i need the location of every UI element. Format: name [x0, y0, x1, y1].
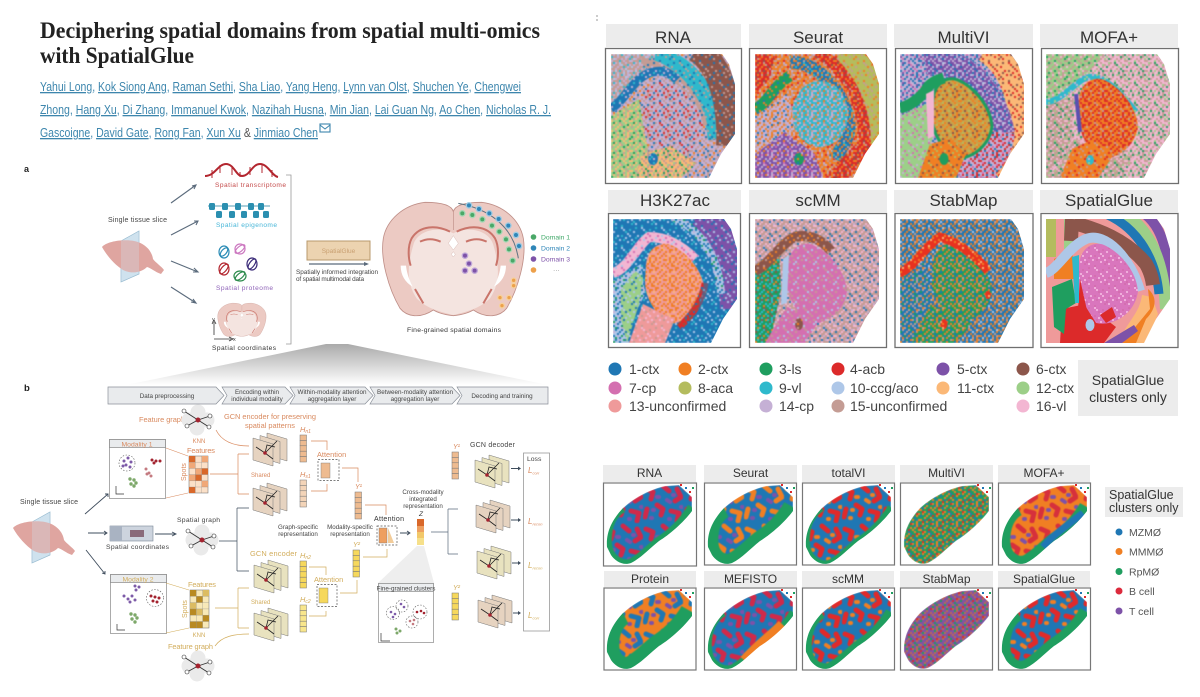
modality-specific attention: Attention [374, 516, 404, 523]
yellow embeddings and attention: Attention [314, 575, 343, 584]
yellow embeddings and attention: H [300, 595, 305, 604]
brain map: Seurat: Seurat [793, 28, 843, 47]
feature matrix 2: Spots [182, 600, 189, 618]
spleen map: scMM [802, 571, 894, 670]
cluster legend: spleen: clusters only [1109, 501, 1179, 515]
loss box [524, 453, 550, 631]
cross-modality Z [402, 489, 458, 554]
title: Deciphering spatial domains from spatial multi-omics [40, 18, 540, 43]
feature matrix 2: KNN [193, 633, 205, 639]
brain map: scMM: scMM [795, 191, 841, 210]
pipeline chevrons: Data preprocessing [140, 393, 195, 400]
cluster legend: brain: 2-ctx [698, 361, 728, 377]
encoders yellow [251, 560, 288, 641]
brain map: Seurat [749, 24, 887, 184]
orange routing [210, 454, 249, 494]
cluster legend: brain: 12-ctx [1036, 380, 1074, 396]
graph-specific caption: Graph-specific [278, 524, 318, 531]
spatial graph: Spatial graph [177, 517, 220, 524]
yellow embeddings and attention: c2 [305, 599, 311, 605]
orange embeddings and attention: s1 [305, 474, 311, 480]
fine-grained clusters inset [377, 546, 435, 642]
cross-modality Z: representation [403, 503, 443, 510]
cluster legend: spleen: MZMØ [1129, 527, 1161, 539]
spleen map: totalVI [802, 465, 895, 565]
modality: spatial transcriptome: Spatial transcriptome [215, 182, 286, 189]
pipeline chevrons [108, 387, 548, 404]
spleen map: MultiVI: MultiVI [928, 466, 965, 480]
yellow embeddings and attention: n2 [305, 555, 311, 561]
spleen map: Protein: Protein [631, 572, 669, 586]
spleen map: MOFA+: MOFA+ [1023, 466, 1065, 480]
pipeline chevrons: Decoding and training [471, 393, 533, 400]
cluster legend: brain: 3-ls [779, 361, 802, 377]
brain map: SpatialGlue: SpatialGlue [1065, 191, 1153, 210]
GCN encoder yellow title: GCN encoder [250, 549, 298, 558]
brain caption: Fine-grained spatial domains [407, 327, 502, 334]
author list: Zhong, Hang Xu, Di Zhang, Immanuel Kwok, Nazihah Husna, Min Jian, Lai Guan Ng, Ao Chen, Nicholas R. J. [40, 102, 551, 117]
brain map: MultiVI [894, 24, 1033, 184]
cluster legend: brain: SpatialGlue [1092, 372, 1164, 388]
feature matrix 2 [182, 580, 216, 639]
feature matrix 2: Features [188, 580, 216, 589]
orange embeddings and attention: n1 [305, 429, 311, 435]
author list: Gascoigne, David Gate, Rong Fan, Xun Xu & Jinmiao Chen [40, 125, 318, 140]
brain map: StabMap [894, 190, 1033, 348]
SpatialGlue box: SpatialGlue [322, 248, 356, 255]
domain legend: Domain 2 [541, 246, 570, 252]
cross-modality Z: Cross-modality [402, 489, 445, 496]
spleen map: Seurat [704, 465, 797, 565]
SpatialGlue box [307, 241, 370, 266]
loss box: L [528, 611, 532, 620]
author list: Yahui Long, Kok Siong Ang, Raman Sethi, Sha Liao, Yang Heng, Lynn van Olst, Shuchen Ye, Chengwei [40, 79, 521, 94]
feature matrix 1 [181, 439, 215, 493]
brain map: MOFA+ [1040, 24, 1178, 184]
panel b: SpatialGlue architecture [13, 383, 550, 682]
graph-specific caption [278, 524, 318, 538]
feature matrix 1: Spots [181, 463, 188, 481]
encoders orange [251, 433, 287, 516]
encoders orange: Shared [251, 473, 270, 479]
pipeline chevrons: Between-modality attention [377, 389, 453, 396]
title [40, 18, 540, 68]
cluster legend: spleen: B cell [1129, 586, 1155, 598]
cluster legend: brain: clusters only [1089, 389, 1167, 405]
cluster legend: brain: 10-ccg/aco [850, 380, 919, 396]
feature graph top [139, 404, 249, 446]
yellow routing [215, 588, 249, 628]
domain legend [531, 234, 570, 274]
modality 2 [110, 574, 189, 634]
cluster legend: brain: 7-cp [629, 380, 656, 396]
cluster legend: brain: 8-aca [698, 380, 733, 396]
feature matrix 1: Features [187, 446, 215, 455]
spatial coordinates tube [106, 526, 176, 551]
modality-specific attention [327, 516, 410, 545]
decoders: GCN decoder [470, 442, 516, 449]
loss box: corr [532, 470, 540, 476]
orange embeddings and attention: H [300, 425, 305, 434]
modality: spatial proteome [216, 243, 273, 292]
spleen map: Protein [604, 571, 696, 670]
modality: spatial proteome: Spatial proteome [216, 285, 273, 292]
main arrows [85, 494, 108, 574]
cluster legend: spleen: RpMØ [1129, 566, 1159, 578]
loss box: recon [532, 522, 543, 526]
brain map: StabMap: StabMap [929, 191, 998, 210]
bracket [286, 175, 291, 344]
spleen map: scMM: scMM [832, 572, 864, 586]
decoders: Y¹ [453, 444, 461, 451]
cross-modality Z: Z [418, 511, 424, 518]
pipeline chevrons: aggregation layer [391, 396, 439, 403]
cross-modality Z: integrated [409, 496, 437, 503]
loss box: corr [532, 616, 540, 620]
spatial graph [177, 508, 249, 571]
title: with SpatialGlue [40, 43, 194, 68]
spleen map: MOFA+ [998, 465, 1090, 565]
GCN encoder title [224, 412, 316, 430]
modality 1 [110, 440, 188, 498]
yellow embeddings and attention: H [300, 551, 305, 560]
arrows to modalities [171, 185, 198, 303]
loss box: L [528, 466, 532, 475]
loss box: Loss [527, 456, 542, 463]
decoders: Y² [453, 585, 461, 592]
panel a: workflow overview [24, 164, 570, 352]
orange embeddings and attention: Y¹ [355, 484, 363, 491]
cluster legend: brain [608, 360, 1178, 416]
modality: spatial epigenome: Spatial epigenome [216, 222, 277, 229]
decoders [452, 442, 521, 628]
spleen map: MEFISTO [704, 571, 797, 670]
spleen map: Seurat: Seurat [733, 466, 769, 480]
graph-specific caption: representation [278, 531, 318, 538]
fine-grained clusters inset: Fine-grained clusters [377, 586, 435, 592]
cluster legend: brain: 16-vl [1036, 398, 1066, 414]
spleen map: SpatialGlue [998, 571, 1090, 670]
tissue slice icon and label [102, 217, 167, 282]
domain legend: Domain 1 [541, 234, 570, 242]
orange embeddings and attention [300, 425, 386, 519]
cluster legend: brain: 11-ctx [957, 380, 994, 396]
loss box: L [528, 561, 532, 570]
pipeline chevrons: aggregation layer [308, 396, 356, 403]
cluster legend: spleen [1105, 487, 1183, 618]
small marker [596, 15, 598, 21]
modality 1: Modality 1 [122, 442, 153, 448]
modality: spatial coordinates [212, 303, 277, 352]
cluster legend: brain: 4-acb [850, 361, 885, 377]
modality 2: Modality 2 [123, 576, 154, 584]
spleen map: RNA: RNA [637, 466, 662, 480]
GCN encoder title: spatial patterns [245, 421, 295, 430]
yellow embeddings and attention: Y² [353, 542, 361, 549]
spleen map: MultiVI [900, 465, 993, 565]
spleen map: StabMap [900, 571, 993, 670]
feature graph bottom: Feature graph [168, 642, 213, 651]
modality: spatial transcriptome [205, 164, 286, 189]
modality: spatial epigenome [208, 203, 277, 229]
integration caption [296, 269, 378, 283]
source tissue slice: Single tissue slice [20, 499, 78, 506]
integration caption: of spatial multimodal data [296, 276, 364, 283]
large coronal brain with domains [383, 202, 524, 316]
brain map: MultiVI: MultiVI [938, 28, 989, 47]
modality: spatial coordinates: x [233, 337, 236, 343]
cluster legend: brain: 14-cp [779, 398, 814, 414]
cluster legend: brain: 6-ctx [1036, 361, 1066, 377]
spleen map: StabMap: StabMap [922, 572, 971, 586]
pipeline chevrons: individual modality [231, 396, 284, 403]
modality-specific attention: representation [330, 531, 370, 538]
orange embeddings and attention: H [300, 470, 305, 479]
modality-specific attention: Modality-specific [327, 524, 373, 531]
spatial coordinates tube: Spatial coordinates [106, 544, 170, 551]
funnel connector [126, 344, 548, 385]
brain map: RNA [606, 24, 742, 184]
loss box: recon [532, 566, 543, 570]
yellow embeddings and attention [300, 542, 387, 632]
feature graph top: Feature graph [139, 415, 185, 424]
cluster legend: brain: 15-unconfirmed [850, 398, 947, 414]
brain map: SpatialGlue [1040, 190, 1178, 348]
GCN encoder title: GCN encoder for preserving [224, 412, 316, 421]
brain map: RNA: RNA [655, 28, 692, 47]
feature matrix 1: KNN [193, 439, 205, 445]
spleen map: SpatialGlue: SpatialGlue [1013, 572, 1075, 586]
cluster legend: brain: 9-vl [779, 380, 802, 396]
label a: a [24, 164, 30, 174]
orange embeddings and attention: Attention [317, 450, 346, 459]
tissue slice icon and label: Single tissue slice [108, 217, 167, 224]
source tissue slice [13, 499, 78, 563]
spleen map: totalVI: totalVI [831, 466, 866, 480]
brain map: scMM [749, 190, 887, 348]
pipeline chevrons: Encoding within [235, 389, 280, 396]
brain map: MOFA+: MOFA+ [1080, 28, 1138, 47]
feature graph bottom [168, 634, 249, 682]
pipeline chevrons: Within-modality attention [298, 389, 367, 396]
modality: spatial coordinates: Spatial coordinates [212, 345, 277, 352]
domain legend: ··· [553, 267, 560, 274]
cluster legend: brain: 13-unconfirmed [629, 398, 726, 414]
modality: spatial coordinates: y [212, 317, 215, 323]
cluster legend: spleen: SpatialGlue [1109, 488, 1174, 502]
brain map: H3K27ac: H3K27ac [640, 191, 710, 210]
cluster legend: spleen: MMMØ [1129, 546, 1163, 558]
brain map: H3K27ac [608, 190, 741, 348]
spleen map: RNA [603, 465, 696, 566]
encoders yellow: Shared [251, 600, 270, 606]
cluster legend: spleen: T cell [1129, 606, 1154, 618]
cluster legend: brain: 1-ctx [629, 361, 659, 377]
cluster legend: brain: 5-ctx [957, 361, 987, 377]
domain legend: Domain 3 [541, 256, 570, 264]
label b: b [24, 383, 30, 394]
loss box: L [528, 517, 532, 526]
spleen map: MEFISTO: MEFISTO [724, 572, 777, 586]
author list [40, 79, 551, 140]
integration caption: Spatially informed integration [296, 269, 378, 276]
